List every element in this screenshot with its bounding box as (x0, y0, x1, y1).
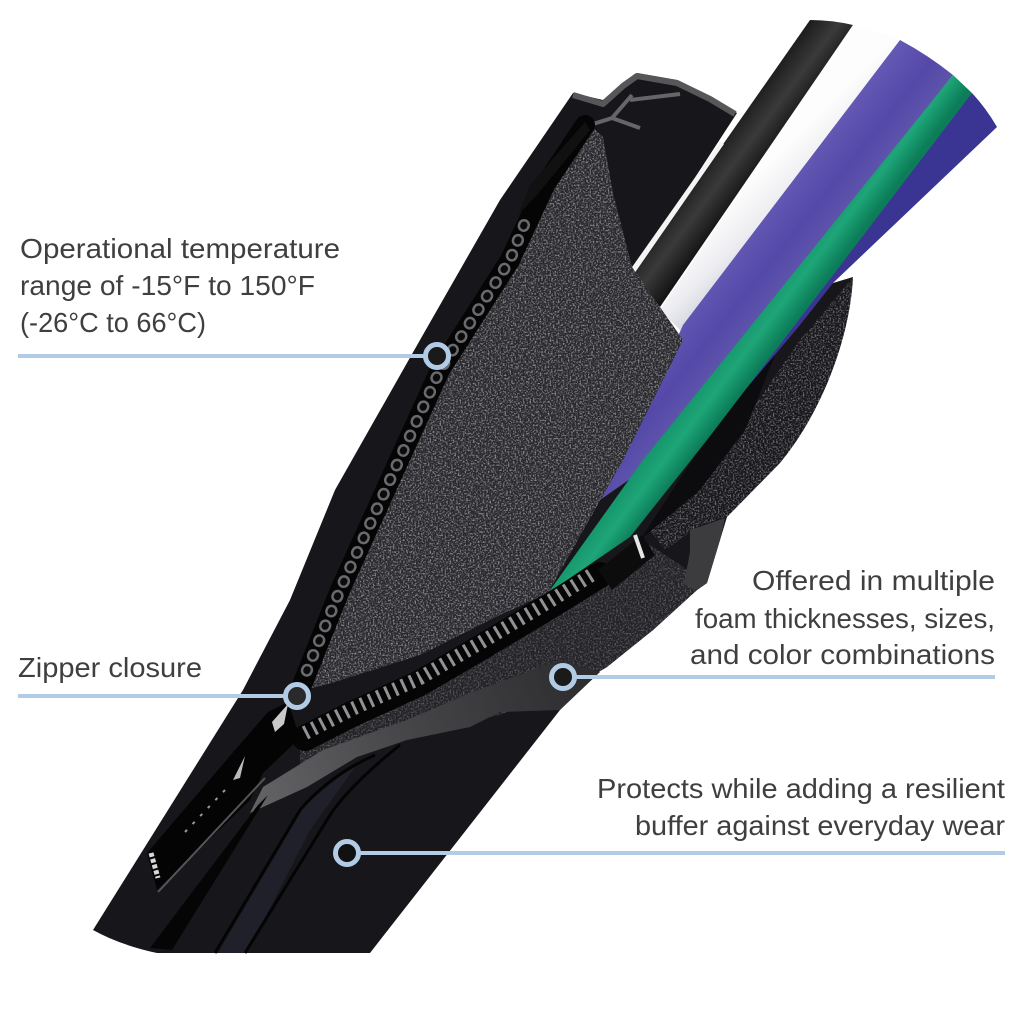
zipper text: Zipper closure (18, 652, 202, 683)
temperature text (20, 233, 340, 338)
lower zipper teeth (305, 572, 600, 738)
foam back rim texture (651, 278, 853, 550)
sleeve back body (93, 73, 853, 953)
purple cable (600, 40, 953, 500)
lower sleeve folds (215, 745, 400, 953)
callout: foam options (552, 565, 995, 688)
foam top edge (573, 76, 735, 114)
callout: temperature range (18, 233, 448, 368)
lower sleeve lighter panel (218, 760, 360, 953)
foam options text: Offered in multiple (752, 565, 995, 596)
protection text (597, 773, 1005, 841)
temperature text: range of -15°F to 150°F (20, 270, 315, 301)
protection marker (336, 842, 358, 864)
left zipper teeth (298, 125, 585, 695)
frayed foam strands (590, 94, 680, 128)
foam options text: foam thicknesses, sizes, (695, 603, 995, 634)
foam options text: and color combinations (690, 639, 995, 670)
temperature text: Operational temperature (20, 233, 340, 264)
zipper leader line (18, 694, 286, 698)
green cable (548, 75, 972, 593)
zipper end stop (598, 535, 655, 590)
protection leader line (359, 851, 1005, 855)
protection text: Protects while adding a resilient (597, 773, 1005, 804)
foam edge lip (250, 660, 600, 813)
zipper tape end (518, 122, 590, 215)
temperature marker (426, 344, 448, 368)
black cable (633, 20, 853, 307)
protection text: buffer against everyday wear (635, 810, 1005, 841)
foam corner (684, 518, 725, 590)
zipper marker (286, 684, 308, 708)
fabric band below zipper (300, 540, 710, 775)
temperature text: (-26°C to 66°C) (20, 307, 206, 338)
zipper slider and pull (147, 702, 300, 950)
temperature leader line (18, 354, 426, 358)
foam options text (690, 565, 995, 670)
dark gap beside green cable (640, 355, 775, 540)
foam marker (552, 666, 574, 688)
white cable (660, 25, 900, 333)
callout: protection (336, 773, 1005, 864)
thin white cable edge (630, 142, 724, 274)
inner flap fabric (300, 120, 690, 695)
dark purple cable (700, 93, 997, 420)
foam leader line (574, 675, 995, 679)
callout: zipper closure (18, 652, 308, 708)
